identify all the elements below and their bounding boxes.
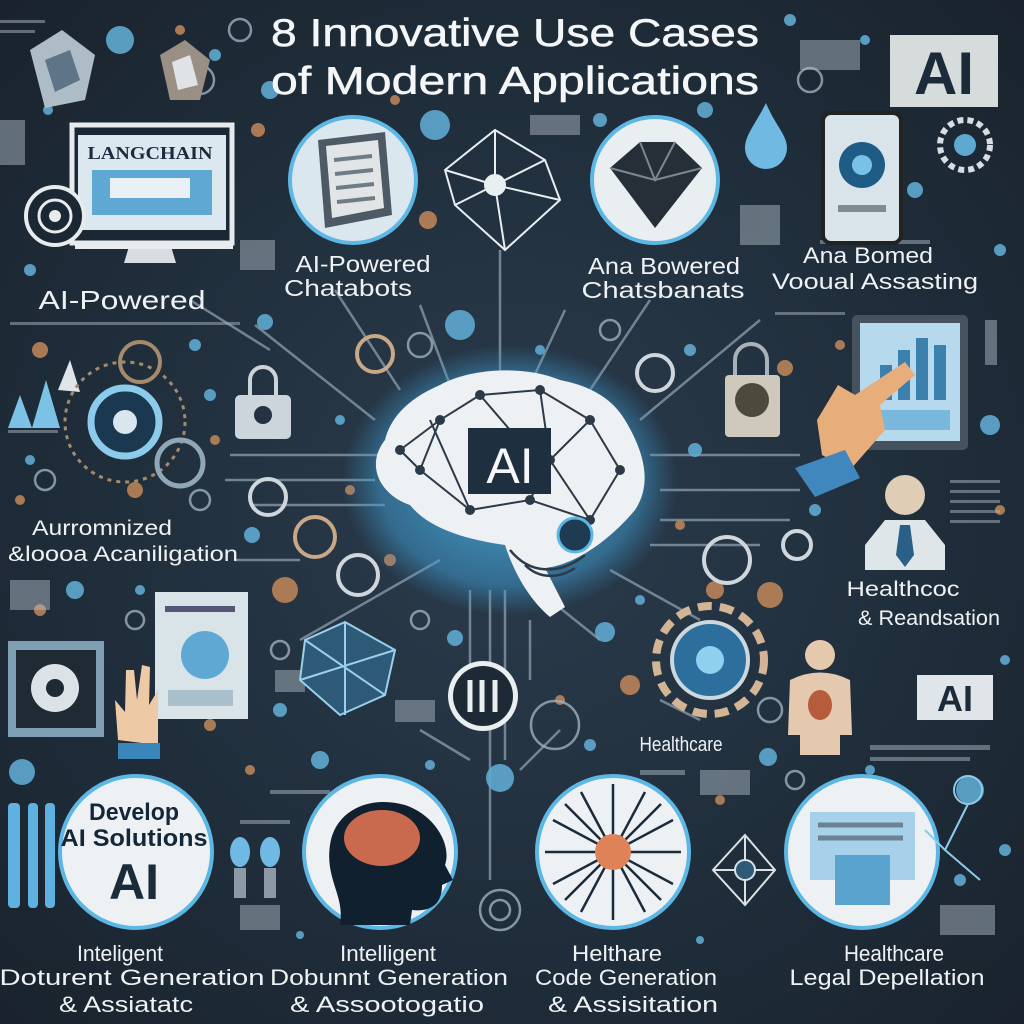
icon: mountains (8, 360, 80, 428)
icon: blue polyhedron (300, 622, 395, 715)
icon: small medallions (250, 336, 811, 595)
label: Visual Assisting: Ana Bomed (803, 243, 933, 268)
icon: AI badge top right: AI (914, 40, 974, 107)
label: Healthcare Realization: Healthcoc (846, 578, 960, 601)
icon: AI badge top right (890, 35, 998, 107)
label: Chatbots center (582, 253, 744, 303)
rings (35, 19, 822, 930)
connector lines (190, 250, 800, 880)
caption 2 (270, 941, 508, 1017)
caption 2: & Assootogatio (290, 992, 484, 1017)
circle: Develop AI Solutions (60, 776, 212, 928)
label: AI-Powered left: AI-Powered (38, 285, 206, 315)
title (271, 12, 759, 103)
icon: LangChain monitor (26, 125, 233, 263)
label: Chatbots center: Chatsbanats (582, 277, 744, 303)
caption 2: Dobunnt Generation (270, 965, 508, 990)
icon: tablet with chart (852, 315, 968, 450)
icon: smartphone (823, 113, 901, 243)
label: AI-Powered Chatbots: AI-Powered (296, 251, 430, 277)
icon: network diamond (713, 835, 775, 905)
icon: AI label right: AI (937, 678, 973, 719)
icon: vertical tubes (8, 803, 55, 908)
icon: raised hand (115, 665, 160, 759)
label: Visual Assisting: Vooual Assasting (772, 269, 978, 294)
icon: circular glyph (448, 661, 518, 731)
title: 8 Innovative Use Cases (271, 12, 759, 55)
title: of Modern Applications (271, 60, 759, 103)
icon: lock tag (725, 344, 780, 437)
circle: dark gem (592, 117, 718, 243)
label: Automated left (8, 517, 238, 566)
circle: document (290, 117, 416, 243)
icon: blue gear medallion (656, 606, 764, 714)
icon: water drop (745, 103, 787, 169)
label: Visual Assisting (772, 243, 978, 294)
label: Healthcare Realization (846, 578, 1000, 630)
caption 3: Helthare (572, 941, 662, 966)
label: Healthcare center: Healthcare (640, 734, 722, 756)
icon: document page (155, 592, 248, 719)
icon: bust with tie (865, 475, 945, 570)
caption 1 (0, 941, 264, 1017)
circle: starburst (537, 776, 689, 928)
icon: crystal collage top left (30, 30, 210, 108)
icon: central blue gear (65, 342, 203, 486)
caption 3: & Assisitation (548, 992, 718, 1017)
icon: padlock (235, 367, 291, 439)
label: Automated left: Aurromnized (32, 517, 172, 540)
central AI brain (376, 370, 645, 617)
caption 2: Intelligent (340, 941, 436, 966)
icon: picture frame left (8, 641, 104, 737)
circle: Develop AI Solutions: AI (109, 854, 159, 910)
label: AI-Powered Chatbots: Chatabots (284, 275, 412, 301)
icon: pointing hand (795, 362, 915, 497)
icon: network polyhedron top (445, 130, 560, 250)
central AI brain: AI (486, 438, 534, 494)
caption 1: Doturent Generation (0, 965, 264, 990)
caption 1: Inteligent (77, 941, 163, 966)
label: Automated left: &loooa Acaniligation (8, 543, 238, 566)
caption 4: Healthcare (844, 941, 944, 966)
caption 1: & Assiatatc (59, 992, 193, 1017)
brain glow (342, 345, 678, 615)
caption 4 (790, 941, 984, 990)
circle: Develop AI Solutions: AI Solutions (60, 825, 208, 852)
circle: legal document (786, 776, 938, 928)
caption 3 (535, 941, 718, 1017)
label: AI-Powered Chatbots (284, 251, 430, 301)
circle: Develop AI Solutions: Develop (89, 799, 179, 826)
circle: head with brain (304, 776, 456, 928)
icon: human body (788, 640, 852, 755)
icon: LangChain monitor: LANGCHAIN (88, 143, 212, 163)
label: Chatbots center: Ana Bowered (588, 253, 740, 279)
icon: bulbs (230, 837, 280, 898)
label: Healthcare Realization: & Reandsation (858, 607, 1000, 630)
caption 3: Code Generation (535, 965, 717, 990)
icon: gear right (940, 120, 990, 170)
caption 4: Legal Depellation (790, 965, 984, 990)
icon: AI label right (917, 675, 993, 720)
icon: network right (925, 776, 982, 880)
